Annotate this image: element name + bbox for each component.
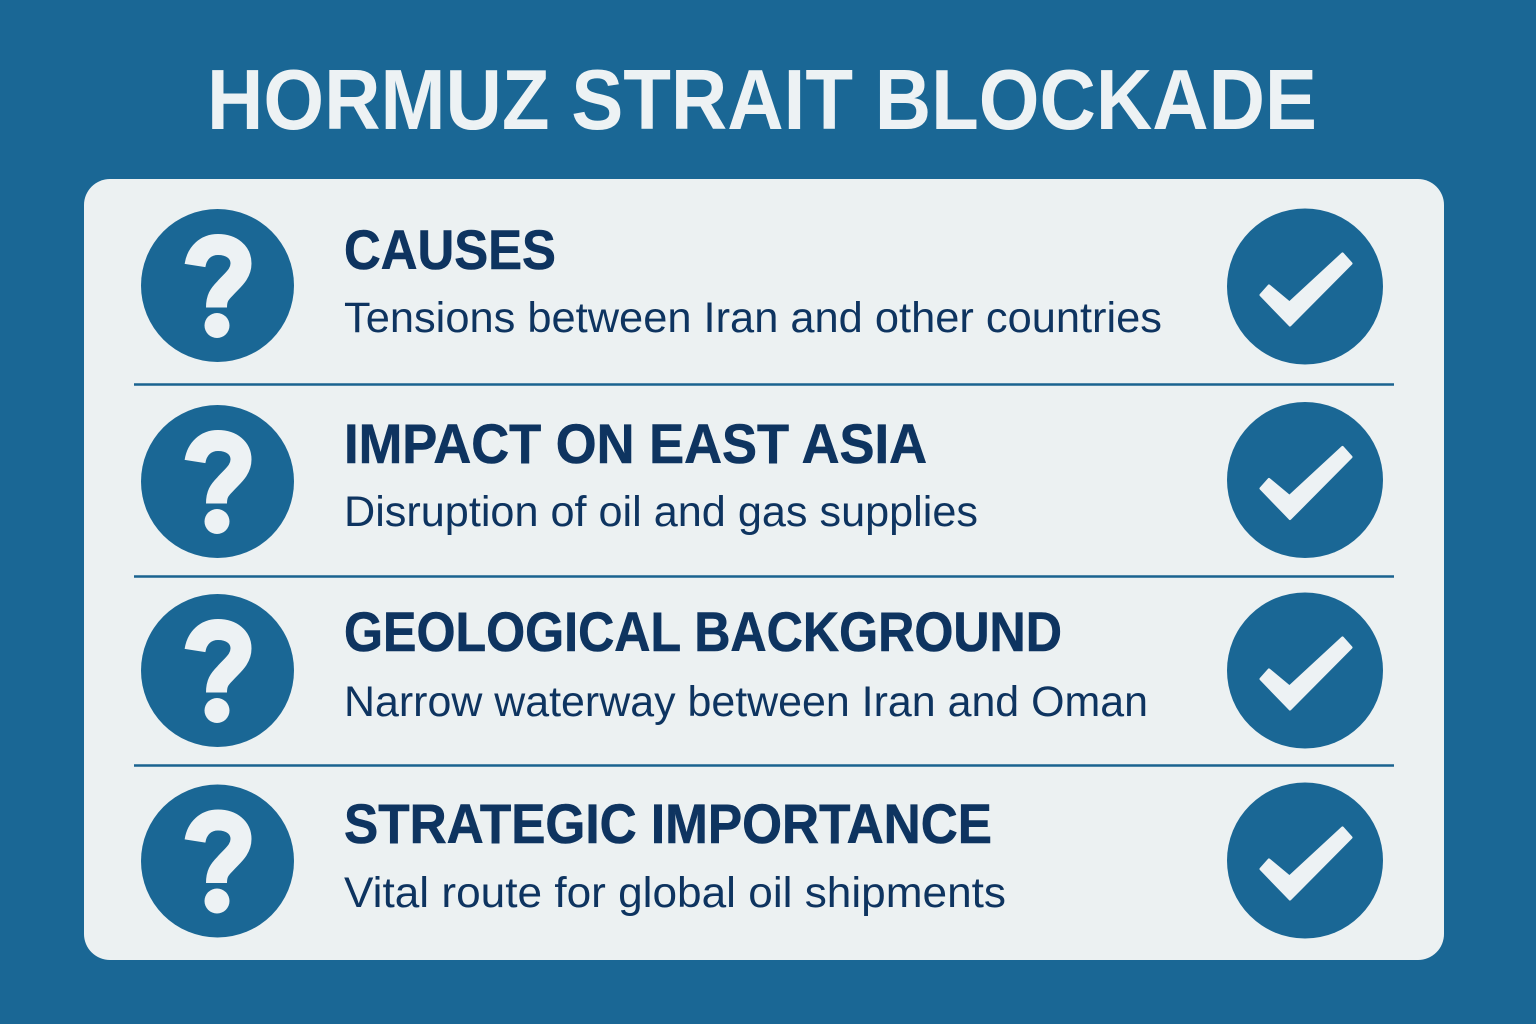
icon: check mark <box>1227 402 1383 558</box>
icon: question mark <box>141 784 294 938</box>
text: strategic description: Vital route for global oil shipments <box>344 869 1006 917</box>
icon: question mark <box>141 594 294 747</box>
row: strategic importance <box>141 782 1383 938</box>
heading: geological background: GEOLOGICAL BACKGROUND <box>344 600 1062 663</box>
icon: check mark <box>1227 208 1383 364</box>
heading: causes: CAUSES <box>344 218 556 281</box>
text: causes description: Tensions between Iran and other countries <box>344 294 1162 342</box>
icon: check mark <box>1227 592 1383 748</box>
text: impact description: Disruption of oil and gas supplies <box>344 488 978 536</box>
icon: check mark <box>1227 782 1383 938</box>
heading: strategic importance: STRATEGIC IMPORTANCE <box>344 792 992 855</box>
text: geological description: Narrow waterway between Iran and Oman <box>344 678 1148 726</box>
panel: main card <box>84 179 1444 960</box>
row: impact on east asia <box>141 402 1383 558</box>
icon: question mark <box>141 405 294 558</box>
icon: question mark <box>141 209 294 362</box>
row: causes <box>141 208 1383 364</box>
row: geological background <box>141 592 1383 748</box>
title: HORMUZ STRAIT BLOCKADE <box>207 53 1317 148</box>
heading: impact on east asia: IMPACT ON EAST ASIA <box>344 412 927 475</box>
